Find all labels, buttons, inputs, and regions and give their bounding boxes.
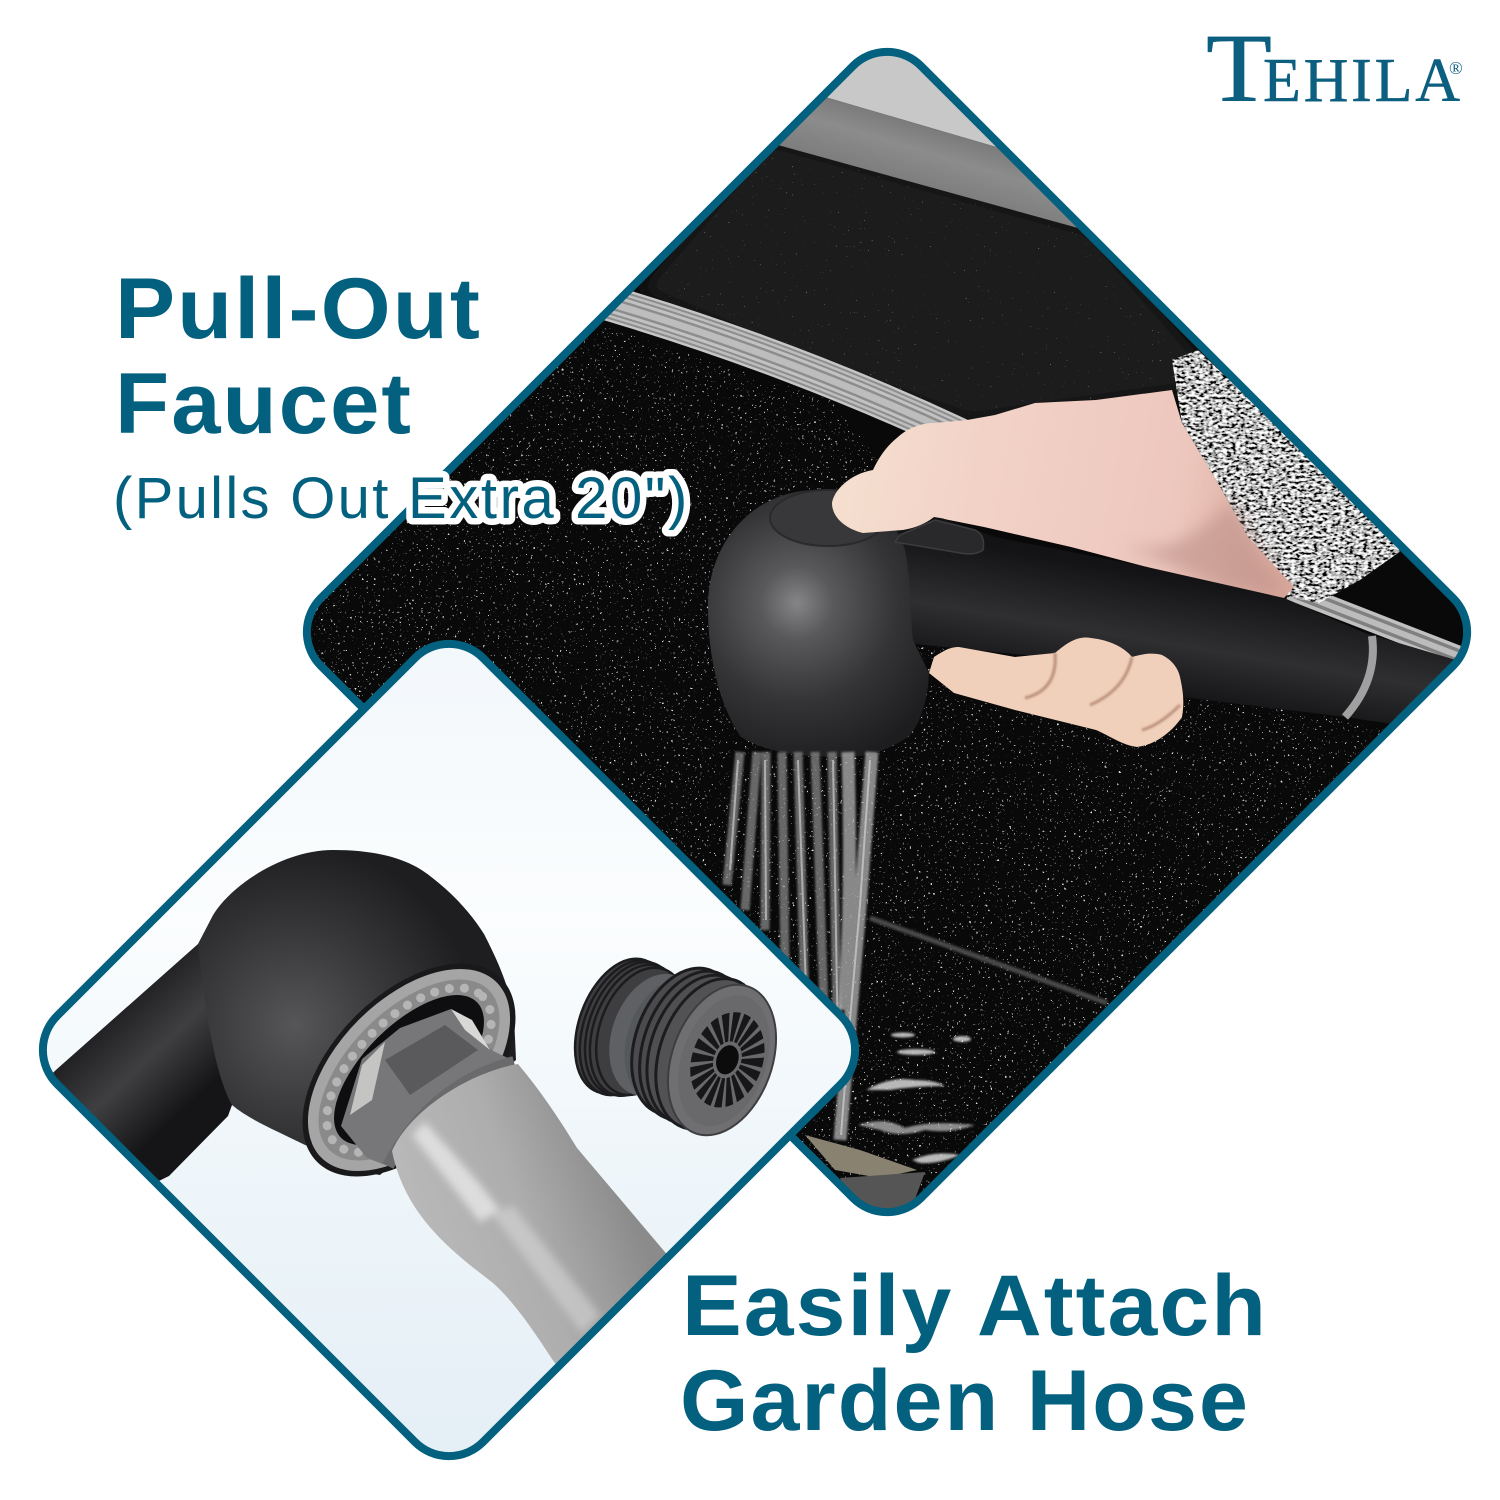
- braided hose: [585, 296, 1480, 664]
- black spout arm: [53, 944, 232, 1181]
- tan drain strip at bottom tip: [805, 1135, 917, 1178]
- tube highlights: [412, 1122, 600, 1333]
- sprayer top button: [770, 490, 886, 546]
- water speckles on sink: [312, 328, 1384, 1190]
- spray water: [727, 752, 872, 1140]
- heading: Easily Attach Garden Hose: Easily Attach: [682, 1258, 1268, 1354]
- sink background: [310, 98, 1464, 1198]
- aerator ring: [302, 964, 516, 1176]
- subheading: pulls out extra 20 inches: (Pulls Out: [113, 466, 391, 531]
- black ball: [198, 850, 516, 1175]
- sink lower ledge: [870, 918, 1107, 1003]
- logo: Tehila: [1206, 15, 1463, 123]
- hand: lower fingers: [929, 638, 1183, 747]
- nut collar: [388, 1062, 514, 1166]
- heading: Easily Attach Garden Hose: [680, 1258, 1268, 1449]
- splash on sink floor: [858, 1032, 975, 1163]
- subheading: pulls out extra 20 inches: Extra 20"): [408, 466, 690, 531]
- heading: Pull-Out Faucet: Faucet: [115, 356, 413, 452]
- logo: Tehila: T: [1206, 15, 1272, 123]
- grey floor at bottom tip: [840, 1172, 925, 1208]
- panel: garden hose adapter photo: [20, 620, 880, 1480]
- knit sleeve: [1172, 350, 1405, 603]
- sprayer handle: [896, 517, 1454, 724]
- sprayer slot button: [895, 520, 984, 554]
- panel: pull-out spray photo: [280, 20, 1500, 1240]
- hex nut: [341, 1009, 510, 1166]
- heading: Easily Attach Garden Hose: Garden Hose: [680, 1353, 1250, 1449]
- handle grey collar: [1345, 636, 1373, 717]
- logo: Tehila: ®: [1449, 58, 1463, 78]
- heading: Pull-Out Faucet: Pull-Out: [115, 261, 482, 357]
- hand: back: [880, 390, 1294, 598]
- sprayer head: [708, 490, 929, 757]
- adapter body: [574, 958, 746, 1130]
- subheading: pulls out extra 20 inches: Extra 20"): [408, 466, 690, 531]
- grey hose tube: [392, 1064, 670, 1370]
- photo background: [47, 648, 852, 1452]
- adapter face grate: [667, 984, 778, 1136]
- thumb over button: [832, 437, 944, 533]
- finger creases: [1025, 653, 1180, 730]
- logo: Tehila: EHILA: [1263, 47, 1460, 115]
- dark upper sink wall: [640, 140, 1220, 420]
- subheading: pulls out extra 20 inches: [113, 466, 690, 531]
- hand shading: [1120, 500, 1285, 596]
- sink upper rim: [779, 56, 1078, 228]
- sparse specks on upper wall: [642, 158, 1187, 414]
- heading: Pull-Out Faucet: [115, 261, 482, 452]
